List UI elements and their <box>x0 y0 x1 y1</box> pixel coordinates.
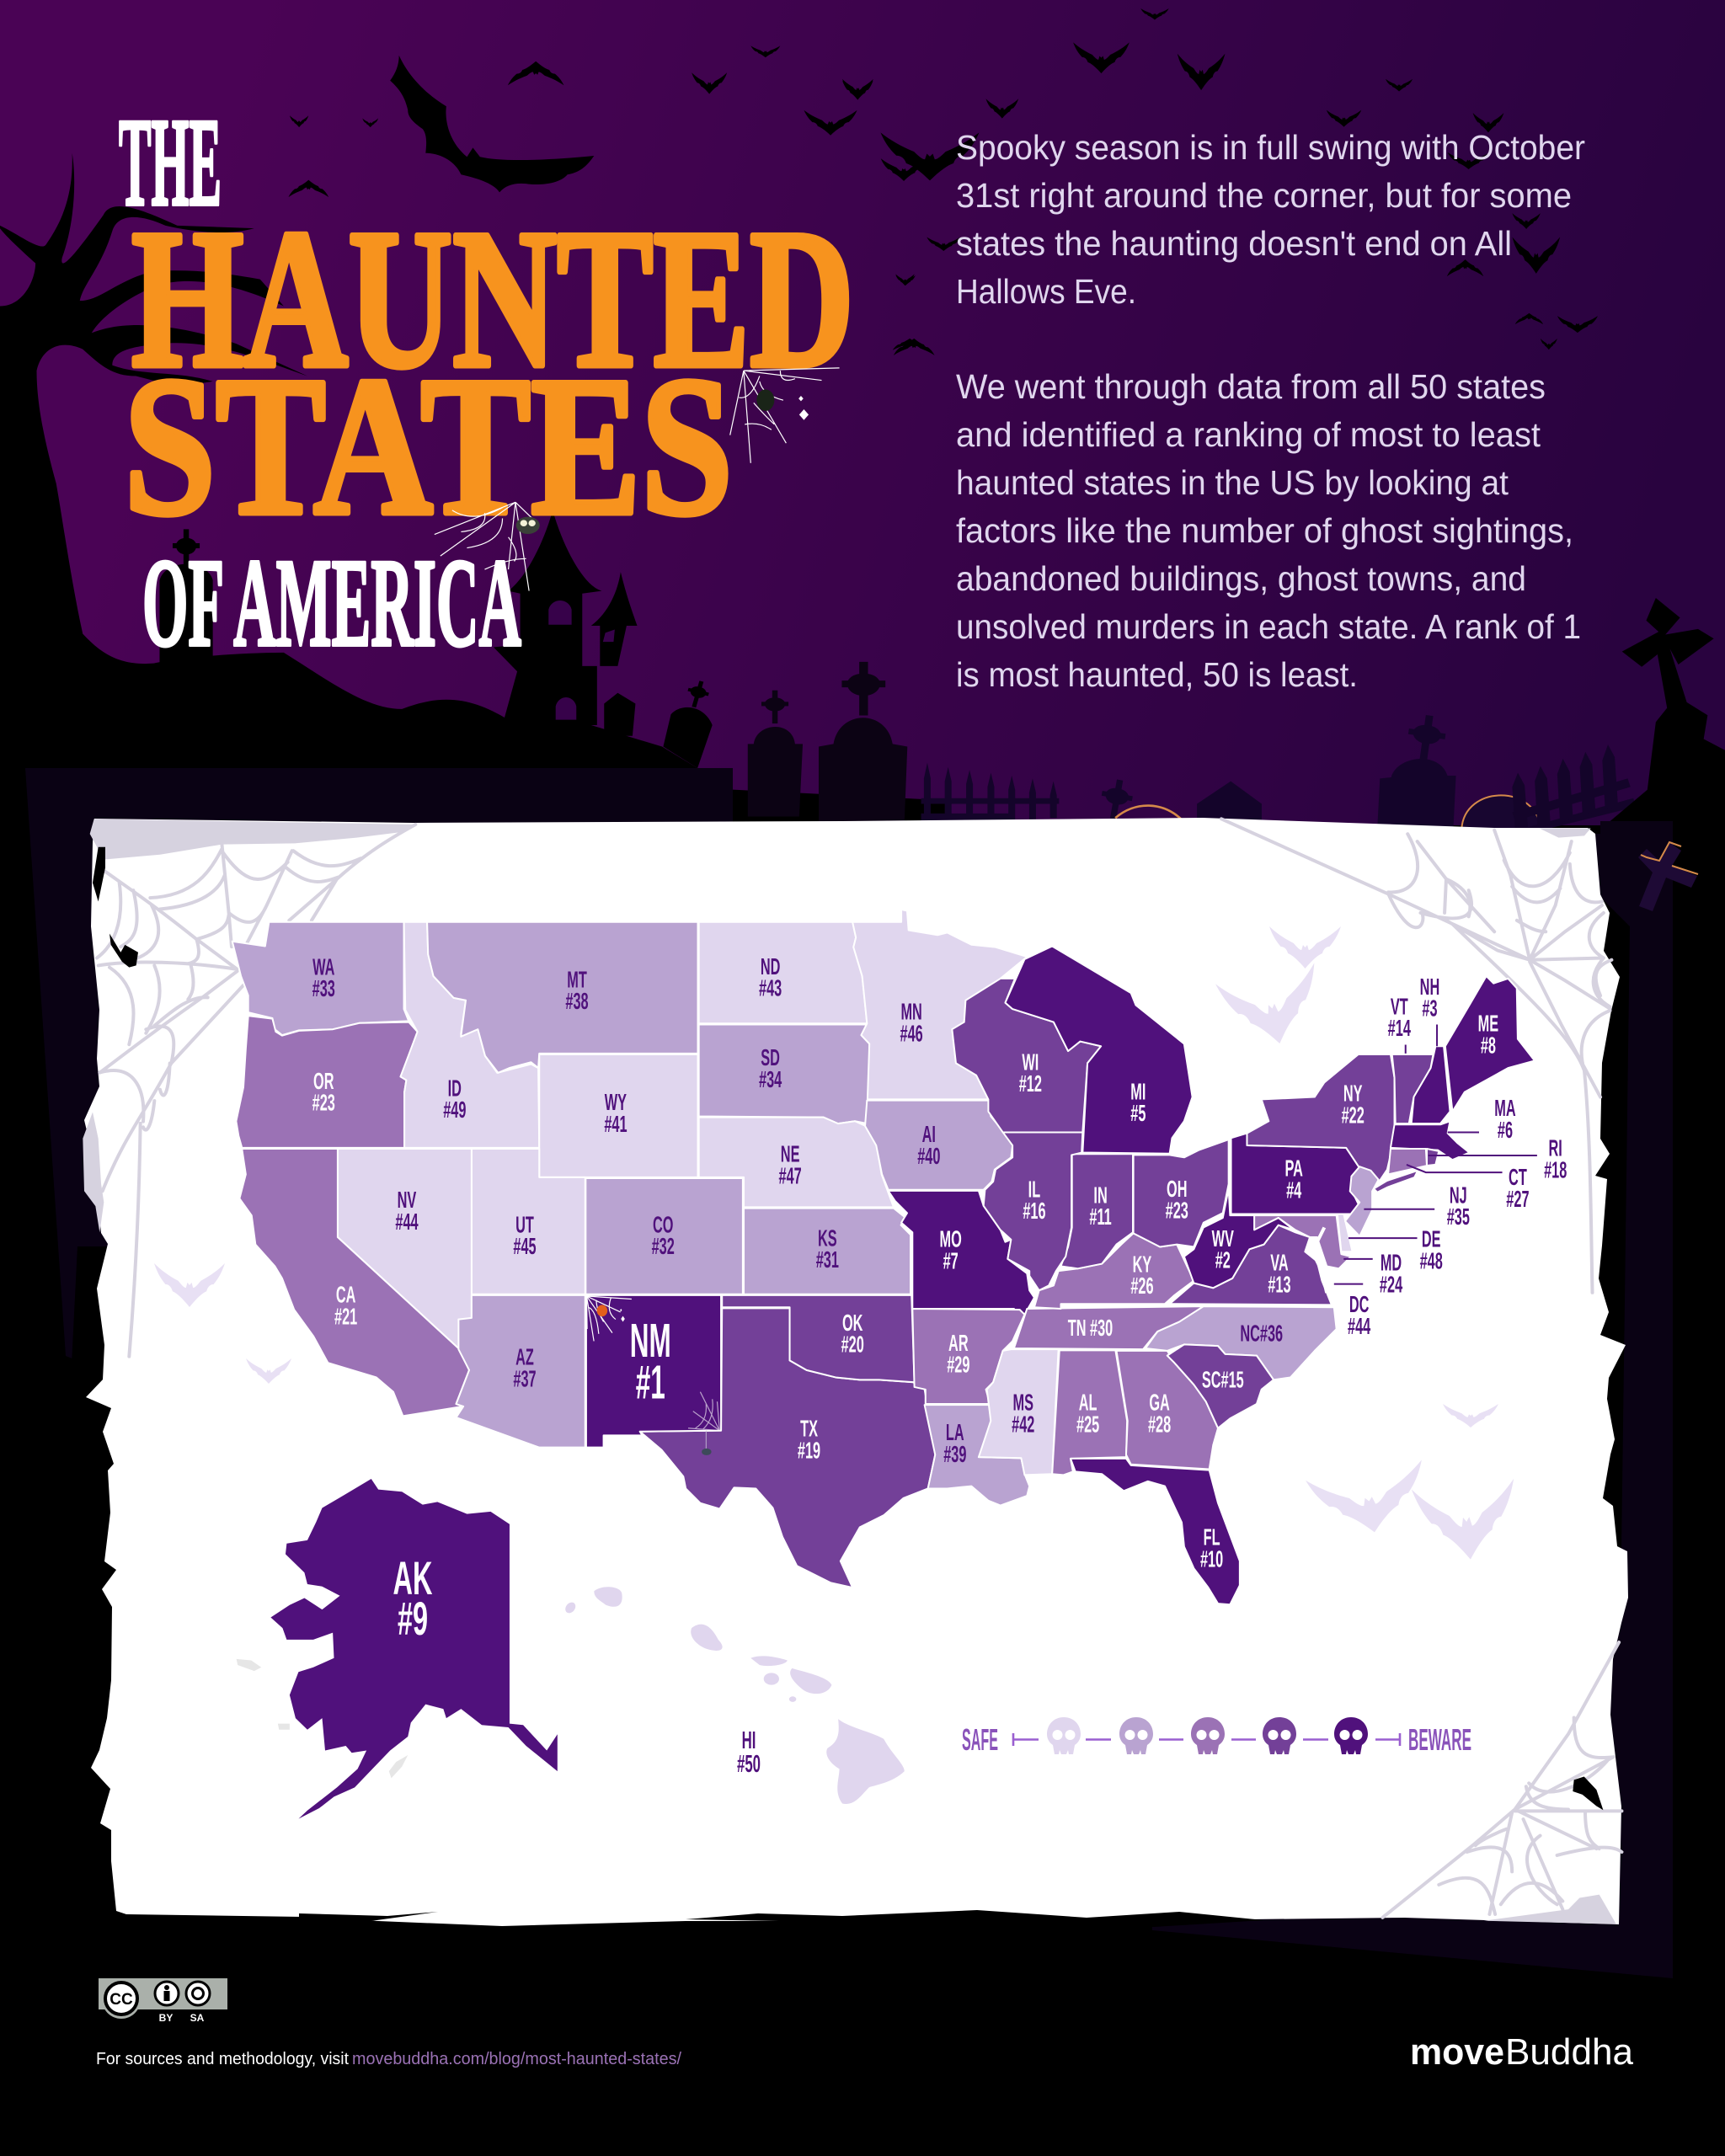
state: Massachusetts <box>1391 1121 1470 1160</box>
label: VT: #14 <box>1388 1015 1411 1041</box>
state: Rhode Island <box>1427 1149 1439 1166</box>
cross on right gravestone <box>1405 712 1448 763</box>
skull: safest <box>1047 1717 1081 1754</box>
state: Pennsylvania <box>1231 1134 1360 1214</box>
state: South Carolina <box>1167 1344 1274 1428</box>
text: BEWARE <box>1408 1722 1471 1757</box>
state: Utah <box>472 1149 585 1294</box>
bat <box>895 274 915 286</box>
state: Oregon <box>236 1016 418 1148</box>
source link: movebuddha.com/blog/most-haunted-states/ <box>352 2050 681 2068</box>
label: NM: NM <box>630 1314 671 1367</box>
label: WA: WA <box>312 953 334 979</box>
bat <box>894 339 935 355</box>
label: WY: #41 <box>604 1110 628 1137</box>
web residue <box>1540 828 1591 838</box>
bat <box>895 275 916 286</box>
label: DE: DE <box>1422 1225 1441 1252</box>
label: IN: IN <box>1093 1182 1108 1208</box>
state: California <box>239 1149 469 1416</box>
label: TX: TX <box>800 1415 818 1442</box>
iron fence <box>921 763 1059 824</box>
label: KY: KY <box>1133 1251 1151 1277</box>
large gravestone <box>819 718 907 822</box>
title: THE <box>119 93 222 232</box>
label: AI: AI <box>922 1120 936 1147</box>
state: Michigan <box>1005 946 1193 1154</box>
title: OF AMERICA <box>142 533 521 673</box>
label: NE: #47 <box>779 1162 802 1188</box>
bat <box>1073 42 1130 73</box>
bat <box>692 72 727 94</box>
state: New Hampshire <box>1412 1046 1450 1123</box>
tree and hill <box>0 153 946 859</box>
state: Kentucky <box>1034 1233 1194 1309</box>
label: AZ: #37 <box>513 1365 537 1391</box>
label: OK: OK <box>842 1309 863 1336</box>
large bat <box>288 45 927 350</box>
bat <box>880 132 979 180</box>
label: CT: #27 <box>1506 1185 1530 1212</box>
title word: HAUNTED: HAUNTED <box>131 189 854 409</box>
spider <box>756 389 774 411</box>
big tilted cross and monument <box>1594 598 1725 884</box>
label: MI: MI <box>1130 1078 1146 1105</box>
label: HI: HI <box>742 1728 756 1754</box>
state: Maryland <box>1254 1215 1351 1268</box>
state: Iowa <box>865 1101 1012 1190</box>
state: Alabama <box>1052 1350 1127 1475</box>
bat <box>1512 237 1560 274</box>
label: ND: ND <box>761 953 780 979</box>
label: FL: #10 <box>1200 1545 1223 1572</box>
map: western states <box>232 922 935 1588</box>
intro text <box>956 128 1585 694</box>
state: Ohio <box>1134 1139 1229 1246</box>
flock of bats <box>288 8 1598 355</box>
tilted cross <box>684 679 712 710</box>
state: Colorado <box>585 1178 743 1294</box>
label: AK: AK <box>393 1552 432 1604</box>
orange spider <box>597 1305 607 1316</box>
bat <box>1515 313 1543 324</box>
title spider webs <box>435 368 840 591</box>
bat <box>1557 316 1598 333</box>
label: IL: #16 <box>1023 1198 1046 1224</box>
label: LA: #39 <box>943 1440 966 1467</box>
label: ID: #49 <box>443 1097 466 1123</box>
skull: dark <box>1263 1717 1296 1754</box>
tilted gravestone <box>663 707 713 768</box>
label: ND: #43 <box>759 974 782 1001</box>
bat <box>362 118 378 127</box>
large cross <box>841 662 885 716</box>
label: VA: #13 <box>1268 1271 1291 1298</box>
label: DC: DC <box>1349 1290 1369 1317</box>
source label: For sources and methodology, visit <box>96 2050 349 2068</box>
label: WI: WI <box>1022 1049 1039 1075</box>
title word: STATES: STATES <box>124 337 733 557</box>
state: Mississippi <box>979 1349 1059 1475</box>
label: MN: #46 <box>900 1020 923 1047</box>
cc icon <box>102 1980 141 2019</box>
label: GA: GA <box>1149 1389 1170 1416</box>
state: New Mexico <box>586 1295 721 1448</box>
bat <box>842 81 873 100</box>
state: Missouri <box>889 1191 1034 1321</box>
label: NV: NV <box>398 1186 417 1213</box>
label: TX: #19 <box>798 1437 820 1463</box>
sparkles <box>798 396 809 420</box>
pale bat <box>246 1358 291 1384</box>
label: DC: #44 <box>1348 1312 1370 1339</box>
state: New York, Long Island <box>1375 1172 1416 1191</box>
label: AL: AL <box>1079 1389 1097 1416</box>
bottom torn slivers <box>299 1910 1263 1927</box>
label: NH: #3 <box>1422 995 1438 1022</box>
paragraph 2: We went through data from all 50 states <box>956 367 1546 406</box>
bat <box>1327 110 1361 127</box>
bat <box>1512 213 1541 229</box>
spider web: bottom right <box>1382 1642 1621 1924</box>
paragraph 1: Spooky season is in full swing with October <box>956 128 1585 167</box>
state: Kansas <box>744 1209 911 1294</box>
label: OH: OH <box>1167 1175 1187 1202</box>
state: Georgia <box>1117 1351 1218 1470</box>
label: VT: VT <box>1391 993 1408 1020</box>
state: Connecticut <box>1388 1149 1427 1174</box>
label: CO: #32 <box>652 1232 675 1259</box>
pale bat <box>1306 1460 1433 1543</box>
skull: darkest <box>1334 1717 1368 1754</box>
label: WA: #33 <box>312 974 335 1001</box>
web on STATES <box>730 368 840 463</box>
label: CA: CA <box>336 1281 355 1308</box>
label: NH: NH <box>1420 973 1439 1000</box>
label: SC: SC#15 <box>1202 1366 1244 1393</box>
web strands <box>97 825 415 1357</box>
logo: moveBuddha <box>1410 2031 1634 2073</box>
label: OH: #23 <box>1166 1197 1188 1224</box>
pale bat <box>154 1263 225 1307</box>
bat <box>1178 54 1226 90</box>
state: North Carolina <box>1146 1306 1337 1380</box>
dark panel behind map <box>25 768 1673 1978</box>
state: Tennessee <box>1014 1306 1204 1349</box>
sa icon <box>186 1982 210 2005</box>
label: MO: MO <box>939 1225 962 1252</box>
round stone with orange arc <box>1461 795 1541 830</box>
black ink splat <box>1573 1777 1603 1810</box>
label: OR: #23 <box>312 1089 335 1116</box>
graveyard silhouette: right side <box>921 598 1725 884</box>
label: ME: ME <box>1478 1010 1498 1037</box>
label: OR: OR <box>313 1067 334 1094</box>
iron fence tilted <box>1512 744 1636 832</box>
bat <box>288 180 328 197</box>
label: KY: #26 <box>1130 1272 1154 1299</box>
state: North Dakota <box>699 922 867 1023</box>
state: Louisiana <box>925 1405 1029 1506</box>
label: NM: #1 <box>636 1356 665 1409</box>
label: NV: #44 <box>395 1208 419 1235</box>
state: Indiana <box>1061 1154 1133 1268</box>
bat <box>881 158 927 181</box>
creative commons badge <box>99 1978 227 2024</box>
state: Montana <box>427 922 698 1073</box>
state: South Dakota <box>699 1024 869 1123</box>
by sa text: BY <box>159 2012 173 2024</box>
faded cross on dark panel <box>1638 842 1697 911</box>
label: MN: MN <box>900 998 922 1025</box>
label: VA: VA <box>1270 1249 1289 1276</box>
state: Nevada <box>338 1149 472 1349</box>
paragraph 2: factors like the number of ghost sightings, <box>956 511 1573 550</box>
label: GA: #28 <box>1148 1411 1171 1437</box>
web sparkles <box>620 1309 625 1321</box>
Chesapeake Bay <box>1312 1228 1327 1293</box>
web strands <box>1221 819 1611 1293</box>
label: NJ: NJ <box>1450 1182 1467 1208</box>
state: New Jersey <box>1345 1166 1379 1236</box>
torn paper map sheet <box>84 818 1628 1926</box>
label: RI: #18 <box>1544 1156 1567 1183</box>
spider web: top right <box>1221 819 1611 1293</box>
map: Alaska and Hawaii <box>237 1479 905 1819</box>
label: IN: #11 <box>1089 1203 1112 1230</box>
paragraph 1 <box>956 128 1585 311</box>
state: Arizona <box>457 1295 585 1448</box>
state: Minnesota <box>852 910 1027 1099</box>
label: AR: AR <box>948 1329 969 1356</box>
gravestone <box>748 727 803 816</box>
black lower background <box>0 825 1725 2156</box>
label: WV: WV <box>1212 1225 1234 1251</box>
state: Wisconsin <box>952 979 1101 1132</box>
label: IL: IL <box>1028 1176 1040 1202</box>
label: NE: NE <box>781 1140 799 1167</box>
bat <box>750 45 780 57</box>
bat <box>804 110 857 136</box>
label: MS: #42 <box>1012 1411 1034 1437</box>
label: PA: #4 <box>1286 1177 1301 1203</box>
label: AL: #25 <box>1076 1411 1099 1437</box>
label: MT: MT <box>567 966 587 992</box>
title <box>119 93 854 673</box>
paragraph 2: unsolved murders in each state. A rank of 1 <box>956 607 1581 646</box>
paragraph 2: is most haunted, 50 is least. <box>956 655 1358 694</box>
pale bat <box>1443 1404 1498 1428</box>
state: Texas <box>640 1308 935 1588</box>
bat <box>1140 8 1169 19</box>
skull: medium <box>1191 1717 1225 1754</box>
Alaska islands <box>237 1659 408 1778</box>
label: PA: PA <box>1284 1155 1303 1182</box>
state: New York <box>1247 1054 1395 1184</box>
black torn edges around paper <box>72 893 1630 1929</box>
haunted house <box>494 510 638 725</box>
label: NY: NY <box>1343 1080 1363 1107</box>
pale bat <box>1412 1479 1522 1565</box>
paragraph 1: Hallows Eve. <box>956 272 1136 311</box>
web residue smear <box>90 819 415 860</box>
paragraph 1: states the haunting doesn't end on All <box>956 224 1512 263</box>
scale connectors <box>1013 1733 1400 1746</box>
map: eastern states <box>852 910 1567 1604</box>
web residue <box>1484 1895 1616 1924</box>
tombstone behind title <box>159 564 213 664</box>
label: FL: FL <box>1204 1524 1220 1550</box>
label: MD: MD <box>1381 1249 1402 1276</box>
state: Nebraska <box>699 1118 894 1207</box>
state: Hawaii islands <box>563 1587 905 1804</box>
label: SD: SD <box>761 1044 780 1070</box>
label: WV: #2 <box>1215 1246 1231 1273</box>
web strands <box>1382 1642 1621 1918</box>
label: MI: #5 <box>1130 1100 1146 1126</box>
label: MA: MA <box>1494 1094 1516 1121</box>
label: NJ: #35 <box>1447 1203 1470 1230</box>
bat <box>1447 259 1483 276</box>
state: Vermont <box>1392 1054 1433 1123</box>
graveyard silhouette: left side <box>0 153 946 859</box>
label: DE: #48 <box>1420 1247 1443 1273</box>
NM spider web <box>586 1296 719 1455</box>
tomb lid <box>1197 782 1262 825</box>
bat <box>508 61 564 85</box>
orange cross outline <box>1641 842 1698 874</box>
state: Maine <box>1445 976 1535 1112</box>
spider web: top left <box>83 819 415 1357</box>
bat <box>1473 113 1503 132</box>
logo: moveBuddha: move <box>1410 2031 1504 2073</box>
label: NY: #22 <box>1342 1102 1365 1129</box>
bat <box>893 339 927 350</box>
state: West Virginia <box>1184 1189 1294 1288</box>
bat <box>290 115 308 127</box>
bat <box>1448 152 1490 169</box>
label: TN: TN #30 <box>1068 1314 1113 1341</box>
paragraph 1: 31st right around the corner, but for some <box>956 176 1572 215</box>
tiny spider <box>702 1449 712 1455</box>
pale bats on the map sheet <box>154 926 1522 1565</box>
state: Arkansas <box>912 1309 1024 1404</box>
label: RI: RI <box>1549 1134 1562 1161</box>
label: SD: #34 <box>759 1065 782 1092</box>
grave cross <box>173 529 200 569</box>
state: Florida <box>1071 1459 1240 1604</box>
pale bat <box>1269 926 1341 969</box>
gravestone right <box>1377 759 1456 832</box>
lower web <box>688 1392 719 1431</box>
label: KS: #31 <box>816 1246 839 1273</box>
label: ID: ID <box>448 1075 462 1102</box>
by icon <box>155 1982 179 2005</box>
label: OK: #20 <box>841 1331 864 1358</box>
bat <box>927 237 960 251</box>
sources footer <box>96 2050 681 2068</box>
orange arc stone <box>1115 806 1183 821</box>
state: Idaho <box>401 922 539 1148</box>
skull: light <box>1119 1717 1153 1754</box>
bat <box>1386 79 1413 92</box>
cc icon: CC <box>109 1991 133 2009</box>
bat <box>985 99 1018 119</box>
label: MT: #38 <box>565 987 589 1014</box>
pale bat <box>1215 963 1329 1054</box>
label: MA: #6 <box>1498 1116 1513 1143</box>
state: Virginia <box>1170 1225 1332 1305</box>
black ink splats <box>93 847 138 968</box>
web on OF AMERICA <box>435 502 540 591</box>
state: Delaware <box>1338 1214 1353 1251</box>
label: WI: #12 <box>1019 1070 1042 1097</box>
label: MD: #24 <box>1380 1271 1402 1298</box>
spider thread <box>705 1431 707 1450</box>
state: Alaska <box>270 1479 558 1819</box>
label: AK: #9 <box>398 1593 428 1645</box>
state: Illinois <box>984 1132 1082 1290</box>
small tomb <box>604 693 635 736</box>
label: MO: #7 <box>943 1247 959 1273</box>
paragraph 2 <box>956 367 1581 694</box>
label: NC: NC#36 <box>1240 1320 1283 1347</box>
paragraph 2: haunted states in the US by looking at <box>956 463 1509 502</box>
state: Wyoming <box>539 1054 698 1177</box>
label: ME: #8 <box>1481 1032 1496 1058</box>
legend: safe to beware scale: SAFE <box>962 1722 998 1757</box>
leader lines to outside labels <box>1334 1024 1537 1284</box>
label: LA: LA <box>946 1418 964 1445</box>
web residue left <box>83 1113 104 1232</box>
label: UT: #45 <box>513 1232 537 1259</box>
bat <box>842 79 873 99</box>
label: UT: UT <box>515 1211 534 1237</box>
paragraph 2: abandoned buildings, ghost towns, and <box>956 559 1526 598</box>
label: KS: KS <box>818 1225 837 1251</box>
spider with eyes <box>516 517 540 534</box>
grave cross small <box>1097 777 1135 821</box>
label: AI: #40 <box>917 1142 940 1169</box>
label: CA: #21 <box>334 1303 357 1329</box>
label: HI: #50 <box>737 1752 761 1778</box>
label: AR: #29 <box>947 1351 969 1378</box>
label: CT: CT <box>1509 1163 1527 1190</box>
label: WY: WY <box>605 1088 627 1115</box>
label: MS: MS <box>1012 1389 1033 1416</box>
legend: safe to beware scale <box>962 1717 1471 1757</box>
paragraph 2: and identified a ranking of most to least <box>956 415 1541 454</box>
label: AZ: AZ <box>515 1343 534 1370</box>
bat <box>1541 339 1557 350</box>
by sa text: SA <box>190 2012 205 2024</box>
label: CO: CO <box>653 1211 673 1237</box>
cross on gravestone <box>761 691 788 723</box>
logo: moveBuddha: Buddha <box>1505 2031 1634 2073</box>
state: Oklahoma <box>722 1295 915 1382</box>
state: Washington <box>232 922 409 1035</box>
